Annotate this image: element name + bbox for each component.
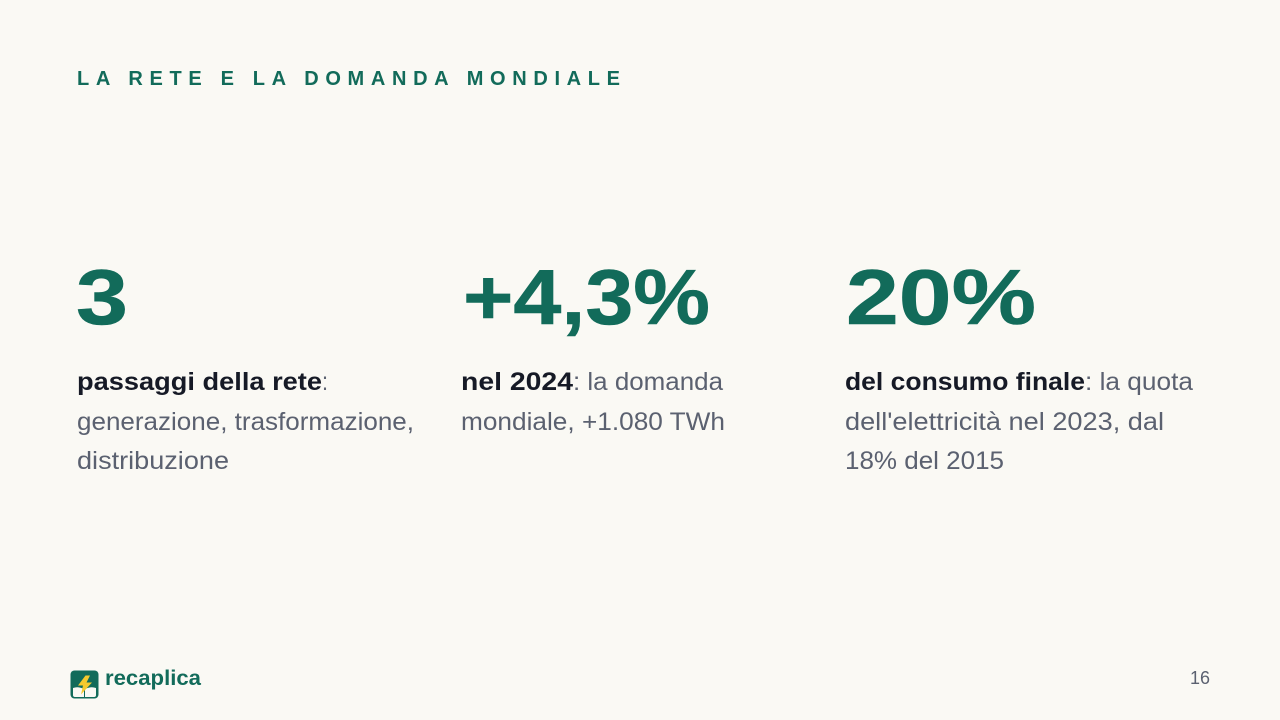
stat number: 3: 3 (76, 253, 128, 341)
text block: passaggi description: : (322, 368, 328, 396)
icon: lightning and open book (70, 670, 98, 698)
stat number: 20%: 20% (846, 253, 1036, 341)
text block: consumo description: : la quota (1085, 368, 1193, 396)
text block: passaggi description: distribuzione (77, 447, 229, 475)
text block: domanda description: mondiale, +1.080 TWh (461, 408, 725, 436)
text block: consumo description (845, 368, 1193, 475)
text block: domanda description: : la domanda (573, 368, 723, 396)
wordmark: recaplica (105, 667, 201, 690)
page number: 16 (1190, 668, 1210, 688)
text block: passaggi description: passaggi della rete (77, 368, 322, 396)
stat number: +4,3%: +4,3% (463, 253, 710, 341)
text block: passaggi description: generazione, trasformazione, (77, 408, 414, 436)
panel: domanda mondiale (461, 253, 725, 436)
text block: consumo description: 18% del 2015 (845, 447, 1004, 475)
text block: passaggi description (77, 368, 414, 475)
text block: consumo description: del consumo finale (845, 368, 1085, 396)
title: LA RETE E LA DOMANDA MONDIALE (77, 68, 620, 90)
text block: consumo description: dell'elettricità nel 2023, dal (845, 408, 1164, 436)
panel: consumo finale (845, 253, 1193, 475)
text block: domanda description (461, 368, 725, 436)
panel: passaggi della rete (76, 253, 414, 475)
logo: recaplica (70, 667, 201, 698)
text block: domanda description: nel 2024 (461, 368, 573, 396)
